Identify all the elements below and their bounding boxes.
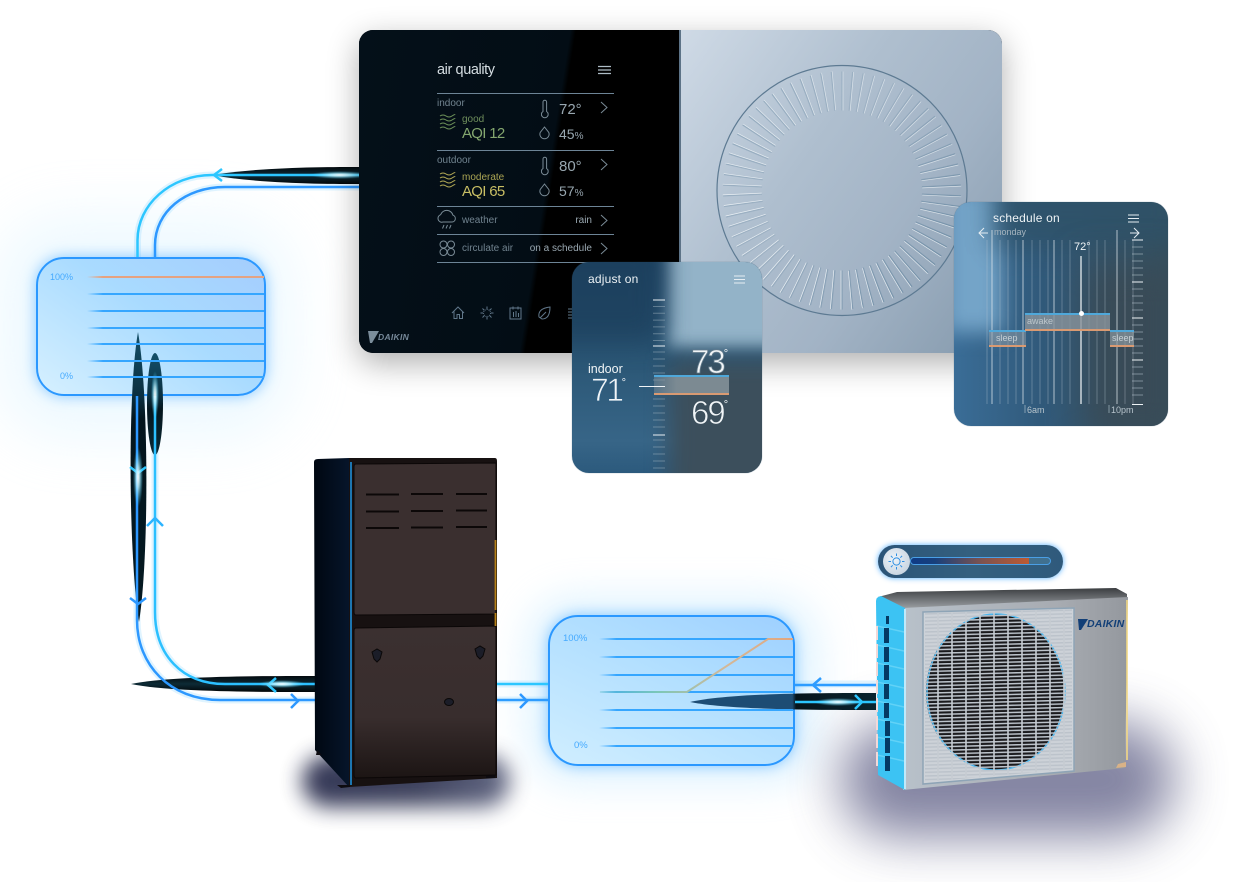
circulate air row: on a schedule xyxy=(530,243,592,254)
setpoint band xyxy=(654,375,729,395)
vents xyxy=(366,494,487,528)
icon: yellow air waves xyxy=(440,173,455,187)
background glow: left chart xyxy=(0,215,295,440)
front corner highlight xyxy=(904,609,906,789)
icon: card menu xyxy=(734,276,745,284)
indoor air quality readout: indoor xyxy=(437,98,465,109)
logo: Daikin on outdoor unit: DAIKIN xyxy=(1087,618,1124,630)
seam highlight xyxy=(679,30,681,353)
temperature ruler xyxy=(1132,240,1143,405)
sleep band right xyxy=(1110,330,1134,347)
outdoor unit xyxy=(876,588,1128,790)
icon: sun xyxy=(883,548,910,575)
weather row: weather xyxy=(462,215,498,226)
chart panel: left load chart background xyxy=(36,257,266,396)
shadow: outdoor unit xyxy=(840,722,1175,837)
door fasteners xyxy=(372,646,485,706)
chart panel: centre compressor chart background xyxy=(548,615,795,766)
outdoor air quality readout: 80° xyxy=(559,158,582,175)
icon: rain cloud xyxy=(438,210,455,228)
lower setpoint: 69° xyxy=(691,394,726,431)
card heading: adjust on xyxy=(588,272,639,286)
thermostat xyxy=(359,30,1002,353)
icons: thermometers and humidity drops xyxy=(540,100,549,196)
grille frame xyxy=(923,608,1074,784)
temperature ruler xyxy=(653,300,665,468)
furnace side xyxy=(314,458,349,787)
thermostat silver plate xyxy=(680,30,1003,353)
icons: row chevrons xyxy=(601,102,607,254)
left chart scale lines xyxy=(50,272,264,381)
furnace xyxy=(314,458,497,788)
screen dividers xyxy=(437,93,614,263)
outdoor air quality readout: AQI 65 xyxy=(462,183,504,200)
sleep band right: sleep xyxy=(1112,333,1134,343)
weather row: rain xyxy=(575,215,592,226)
card backdrop: frosted silver xyxy=(954,202,1168,426)
upper door xyxy=(354,463,496,615)
slider track xyxy=(910,557,1051,565)
unit front xyxy=(903,597,1128,790)
weather row xyxy=(462,215,592,226)
left chart scale lines: 100% xyxy=(50,272,73,282)
awake band: awake xyxy=(1027,316,1053,326)
outdoor air quality readout xyxy=(437,155,584,200)
amber edge light xyxy=(1126,600,1128,760)
icon: screen menu xyxy=(598,66,611,74)
side vents xyxy=(884,616,890,771)
side light bands xyxy=(877,626,904,761)
awake band xyxy=(1025,313,1110,331)
centre chart scale lines and capacity curve xyxy=(563,633,793,751)
ventilation ring xyxy=(716,64,968,316)
furnace front frame xyxy=(349,458,497,787)
sleep band left: sleep xyxy=(996,333,1018,343)
logo: Daikin on thermostat: DAIKIN xyxy=(378,332,409,342)
light hotspots xyxy=(133,171,862,706)
axis label: 10pm: 10pm xyxy=(1111,405,1134,415)
outdoor air quality readout: moderate xyxy=(462,172,504,183)
indoor air quality readout xyxy=(437,98,584,142)
centre chart scale lines and capacity curve: 100% xyxy=(563,633,587,644)
current time marker xyxy=(1079,311,1084,316)
outdoor temperature slider xyxy=(878,545,1063,578)
flow arrows xyxy=(130,169,862,709)
indoor air quality readout: 72° xyxy=(559,101,582,118)
icons: bottom navigation xyxy=(452,306,574,320)
icon: fan xyxy=(440,241,454,256)
upper setpoint: 73° xyxy=(691,343,726,380)
card backdrop: frosted silver and dark xyxy=(572,262,762,473)
outdoor air quality readout: 57% xyxy=(559,183,583,199)
schedule time grid xyxy=(986,230,1134,413)
indoor reading xyxy=(588,362,626,408)
background glow: centre chart xyxy=(525,595,820,785)
icon: green air waves xyxy=(440,115,455,129)
indoor air quality readout: good xyxy=(462,114,484,125)
blue edge light xyxy=(350,462,352,785)
unit cyan side xyxy=(876,596,905,790)
icon: next day arrow xyxy=(1130,228,1140,238)
pipes xyxy=(137,175,876,702)
needles xyxy=(131,167,876,710)
day label: monday xyxy=(994,227,1026,237)
side pink light strip xyxy=(876,626,878,770)
outdoor air quality readout: outdoor xyxy=(437,155,471,166)
feet xyxy=(316,750,495,788)
centre chart scale lines and capacity curve: 0% xyxy=(574,740,588,751)
shadow: furnace xyxy=(302,755,510,807)
logo: Daikin on thermostat xyxy=(368,331,409,343)
unit top xyxy=(878,588,1127,610)
panel: schedule on card xyxy=(954,202,1168,426)
screen heading: air quality: air quality xyxy=(437,62,495,78)
circulate air row xyxy=(462,243,592,254)
indoor reading: 71° xyxy=(591,372,624,408)
amber edge light xyxy=(494,540,496,626)
indoor reading: indoor xyxy=(588,362,623,376)
panel: adjust on card xyxy=(572,262,762,473)
axis label: 6am: 6am xyxy=(1027,405,1045,415)
icon: previous day arrow xyxy=(978,228,988,238)
left chart scale lines: 0% xyxy=(60,371,73,381)
indoor temperature pointer xyxy=(639,386,665,387)
fan and grille xyxy=(925,610,1072,780)
Daikin logo mark xyxy=(1078,619,1088,630)
indoor air quality readout: AQI 12 xyxy=(462,125,504,142)
thermostat black screen sheen xyxy=(359,30,679,353)
circulate air row: circulate air xyxy=(462,243,513,254)
indoor air quality readout: 45% xyxy=(559,126,583,142)
lower door xyxy=(354,626,496,778)
icon: card menu xyxy=(1128,214,1139,222)
card heading: schedule on xyxy=(993,211,1060,225)
sleep band left xyxy=(989,330,1026,347)
current temperature: 72° xyxy=(1074,241,1091,253)
